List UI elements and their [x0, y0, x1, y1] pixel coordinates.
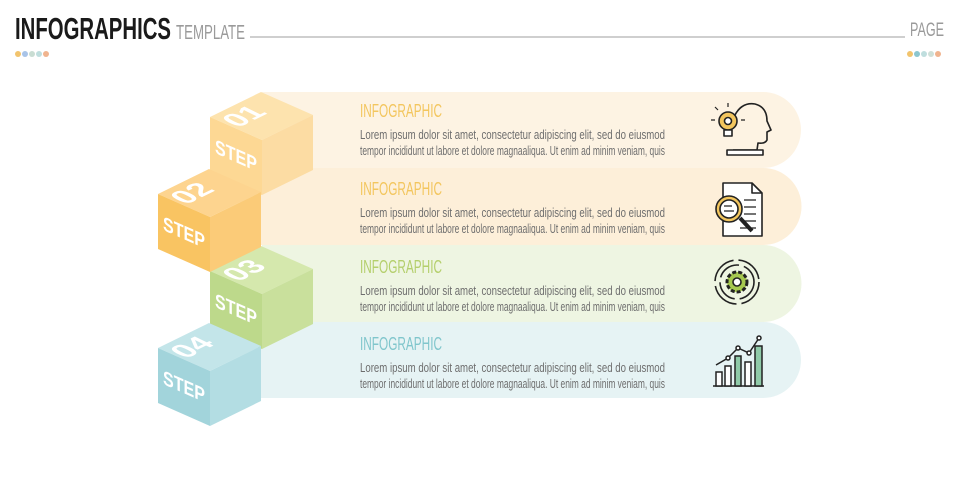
- band 2: [240, 168, 802, 245]
- header title: [15, 11, 944, 46]
- icon: head with lightbulb: [711, 103, 771, 155]
- cube 1: 01: [215, 102, 274, 131]
- header title: TEMPLATE: [176, 22, 245, 44]
- text block 1: [360, 101, 665, 158]
- text block 2: INFOGRAPHIC: [360, 179, 442, 199]
- cube 3: [210, 246, 313, 349]
- cube 3: STEP: [215, 290, 257, 330]
- text block 3: Lorem ipsum dolor sit amet, consectetur adipiscing elit, sed do eiusmod: [360, 284, 665, 298]
- band 4: [240, 322, 801, 398]
- cube 3: 03: [215, 256, 274, 285]
- cube 2: [158, 169, 261, 272]
- cube 1: [210, 92, 313, 195]
- band 1: [262, 92, 801, 168]
- cube 4: STEP: [163, 367, 205, 407]
- header title: INFOGRAPHICS: [15, 11, 171, 46]
- text block 3: [360, 257, 665, 314]
- cube 2: 02: [163, 179, 222, 208]
- text block 1: tempor incididunt ut labore et dolore magnaaliqua. Ut enim ad minim veniam, quis: [360, 144, 665, 158]
- band 3: [262, 245, 801, 322]
- cube 1: STEP: [215, 136, 257, 176]
- header dots: [15, 51, 941, 57]
- icon: gear with cycle arrows: [715, 260, 759, 304]
- icon: document with magnifier: [716, 183, 762, 236]
- text block 4: INFOGRAPHIC: [360, 334, 442, 354]
- text block 1: INFOGRAPHIC: [360, 101, 442, 121]
- text block 4: Lorem ipsum dolor sit amet, consectetur adipiscing elit, sed do eiusmod: [360, 361, 665, 375]
- text block 4: [360, 334, 665, 391]
- text block 3: tempor incididunt ut labore et dolore magnaaliqua. Ut enim ad minim veniam, quis: [360, 300, 665, 314]
- cube 4: [158, 323, 261, 426]
- text block 2: Lorem ipsum dolor sit amet, consectetur adipiscing elit, sed do eiusmod: [360, 206, 665, 220]
- text block 4: tempor incididunt ut labore et dolore magnaaliqua. Ut enim ad minim veniam, quis: [360, 377, 665, 391]
- icon: bar chart with trend: [713, 336, 764, 386]
- text block 2: [360, 179, 665, 236]
- header title: PAGE: [910, 20, 944, 41]
- text block 2: tempor incididunt ut labore et dolore magnaaliqua. Ut enim ad minim veniam, quis: [360, 222, 665, 236]
- cube 4: 04: [163, 333, 223, 362]
- cube 2: STEP: [163, 213, 205, 253]
- text block 1: Lorem ipsum dolor sit amet, consectetur adipiscing elit, sed do eiusmod: [360, 128, 665, 142]
- text block 3: INFOGRAPHIC: [360, 257, 442, 277]
